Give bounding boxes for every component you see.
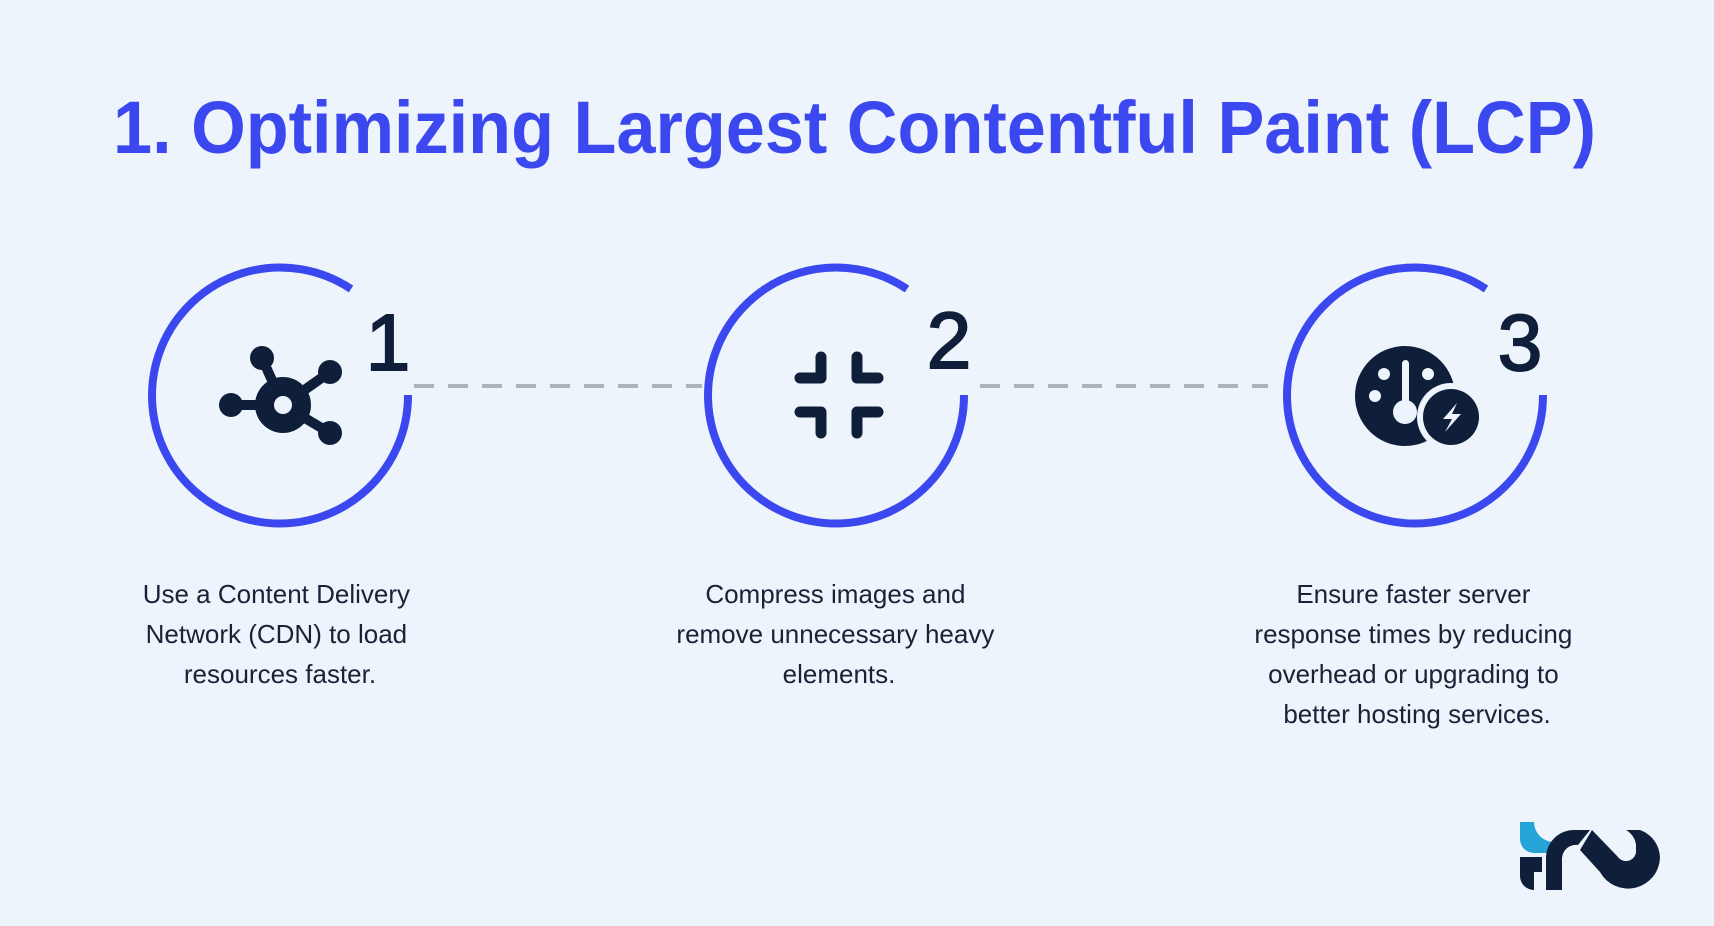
icon: speed gauge with bolt [1355,346,1485,451]
icon: network hub [219,346,342,445]
icon: compress [800,357,878,433]
number 2: 2 [927,296,971,385]
ring 2 [708,268,964,524]
step 3 [1287,268,1543,524]
step 1 [152,268,410,524]
title: 1. Optimizing Largest Contentful Paint (LCP) [113,86,1596,169]
connector: dashed line 2-3 [980,384,1268,388]
text: step 1 description: Use a Content Delivery [143,579,410,609]
logo [1520,822,1660,890]
ring 1 [152,268,408,524]
text: step 1 description: resources faster. [184,659,376,689]
number 3: 3 [1498,298,1542,387]
text: step 2 description: elements. [783,659,895,689]
text: step 3 description: overhead or upgrading to [1268,659,1559,689]
number 1: 1 [366,298,410,387]
text: step 3 description: Ensure faster server [1296,579,1531,609]
connector: dashed line 1-2 [414,384,702,388]
text: step 3 description: better hosting services. [1283,699,1551,729]
step 2 [708,268,971,524]
text: step 1 description: Network (CDN) to load [146,619,407,649]
text: step 3 description: response times by reducing [1254,619,1572,649]
text: step 2 description: remove unnecessary heavy [676,619,994,649]
text: step 2 description: Compress images and [705,579,965,609]
ring 3 [1287,268,1543,524]
